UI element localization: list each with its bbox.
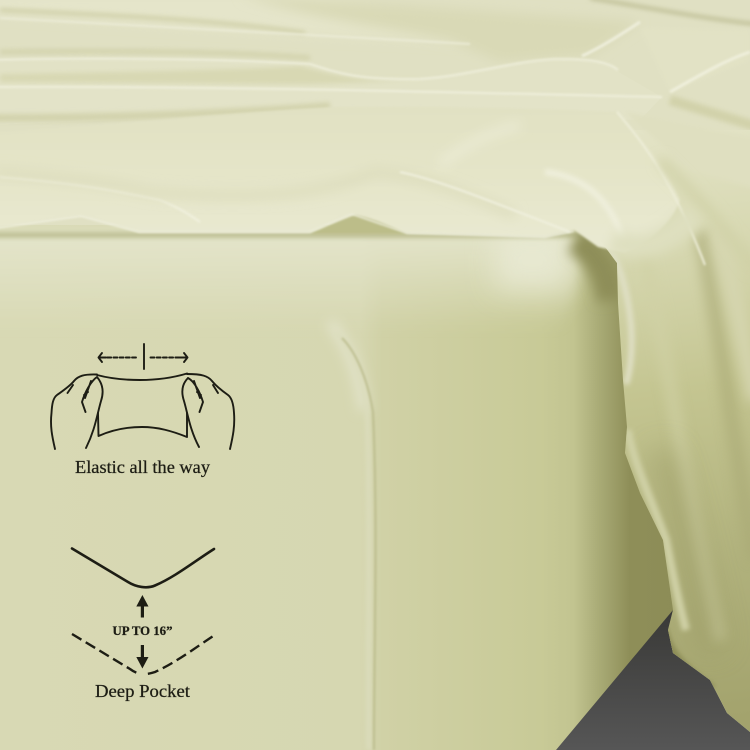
hanging right drape of flat sheet [560,130,750,732]
icon: hands stretching elastic fabric [51,344,234,449]
blend between main fold and drape [612,215,695,246]
main front fold of flat sheet with hem [0,107,680,252]
label: Elastic all the way: Elastic all the way [75,457,210,477]
hem shading and notch [0,112,750,270]
icon: up arrow [136,595,148,618]
icon: right hand [182,374,234,449]
mattress top edge highlight [0,232,618,316]
icon: solid curve [72,548,214,587]
icon: dashed curve [72,634,212,674]
icon: outward arrows [98,344,188,369]
corner seam of fitted sheet [330,322,376,750]
fitted sheet on mattress [0,225,690,750]
label: Deep Pocket: Deep Pocket [95,681,190,701]
callout: elastic all the way [51,344,234,477]
floor [556,610,750,750]
icon: down arrow [136,645,148,668]
label: up to 16 inches: UP TO 16” [112,624,172,638]
drape folds [604,230,750,692]
callout: deep pocket [72,548,214,701]
background folds of the flat sheet [0,0,750,240]
icon: left hand [51,374,103,449]
icon: fabric [97,374,187,437]
